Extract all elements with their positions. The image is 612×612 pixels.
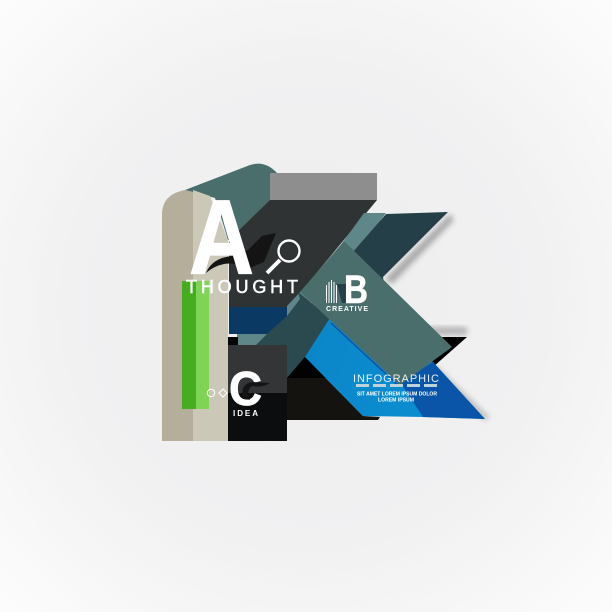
shape: near black base xyxy=(287,357,380,420)
shape: dark grey box xyxy=(228,345,287,393)
shape: tan pillar xyxy=(162,190,228,441)
green bar xyxy=(182,281,209,409)
letter B: B xyxy=(344,268,368,312)
shape: dark panel xyxy=(229,200,377,308)
shape: dark blue fold xyxy=(400,362,485,419)
shape: teal curved band xyxy=(185,164,277,240)
shape: main teal fold xyxy=(300,241,452,385)
shape: teal strip xyxy=(237,334,287,345)
shape: grey rectangle xyxy=(270,173,377,200)
shape: blue fold xyxy=(305,318,485,419)
swoosh behind A xyxy=(206,233,276,273)
shape: light teal strip xyxy=(340,213,386,254)
graphic: layered folded shapes xyxy=(162,164,490,441)
shape: dark blue edge line xyxy=(331,323,400,387)
shape: navy rectangle xyxy=(229,307,287,334)
caption lines: SIT AMET LOREM IPSUM DOLOR xyxy=(357,392,437,398)
label: CREATIVE: CREATIVE xyxy=(326,306,368,313)
letter C: C xyxy=(229,363,262,416)
shadow: above black band xyxy=(410,327,467,335)
shape: dark teal lower fold xyxy=(256,292,340,380)
text block: infographic xyxy=(353,373,439,404)
label: IDEA: IDEA xyxy=(233,409,258,418)
icon: circle and diamond xyxy=(207,389,227,397)
shape: light teal lower strip xyxy=(287,290,312,325)
text block: infographic: LOREM IPSUM xyxy=(378,398,414,404)
shadow: dark teal fold xyxy=(385,214,454,284)
dark wedge behind B xyxy=(337,284,347,303)
icon: bars xyxy=(326,280,337,303)
letter A: A xyxy=(189,178,254,296)
heading: INFOGRAPHIC: INFOGRAPHIC xyxy=(353,373,439,385)
shape: dark teal upper fold xyxy=(352,212,448,283)
shape: black band xyxy=(420,337,467,367)
shadow: blue fold xyxy=(430,366,490,420)
swoosh over C xyxy=(242,382,270,400)
shape: black box xyxy=(228,393,287,441)
icon: magnifying glass xyxy=(267,240,300,273)
divider bars xyxy=(356,384,437,387)
shape: black triangle xyxy=(287,357,345,378)
shape: black square xyxy=(228,337,238,345)
heading: THOUGHT: THOUGHT xyxy=(186,277,298,297)
